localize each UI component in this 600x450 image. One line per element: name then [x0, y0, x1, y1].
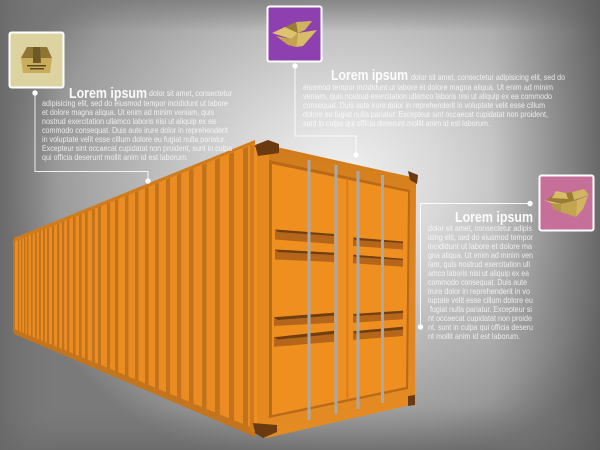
body text: qui officia deserunt mollit anim id est laborum.	[42, 152, 188, 162]
body text	[428, 223, 533, 341]
door frame	[250, 145, 416, 438]
body text: commodo consequat. Duis aute irure dolor in reprehenderit	[42, 125, 229, 135]
body text: et dolore magna aliqua. Ut enim ad minim veniam, quis	[42, 107, 214, 117]
body text: dolor sit amet, consectetur	[149, 88, 232, 98]
connector line: right callout	[418, 201, 533, 330]
body text: irure dolor in reprehenderit in vo	[428, 286, 530, 296]
icon: open box on pink	[540, 176, 594, 230]
container side wall with corrugation	[13, 140, 255, 440]
body text: iam, quis nostrud exercitation ull	[428, 259, 530, 269]
body text: eiusmod tempor incididunt ut labore et dolore magna aliqua. Ut enim ad minim	[303, 82, 553, 92]
body text: nt mollit anim id est laborum.	[428, 331, 520, 341]
door slots	[274, 230, 403, 347]
text block: top callout	[303, 68, 565, 128]
body text: adipisicing elit, sed do eiusmod tempor incididunt ut labore	[42, 98, 228, 108]
text block: left callout	[42, 86, 232, 162]
door recess outline	[269, 160, 410, 418]
body text: dolor sit amet, consectetur adipisicing elit, sed do	[411, 72, 565, 82]
heading: Lorem ipsum	[69, 86, 147, 102]
bottom rail	[14, 329, 255, 437]
connector line: top callout	[292, 63, 359, 158]
icon: closed cardboard box	[10, 32, 64, 88]
icon: open box on purple	[268, 6, 322, 62]
top rail	[14, 140, 255, 242]
corner post	[250, 147, 269, 433]
body text: Excepteur sint occaecat cupidatat non proident, sunt in culpa	[42, 143, 232, 153]
text block: right callout	[428, 210, 533, 341]
container door end	[250, 140, 418, 438]
body text: amco laboris nisi ut aliquip ex ea	[428, 268, 529, 278]
body text: veniam, quis nostrud exercitation ullamco laboris nisi ut aliquip ex ea commodo	[303, 91, 552, 101]
body text: commodo consequat. Duis aute	[428, 277, 527, 287]
body text: nostrud exercitation ullamco laboris nisi ut aliquip ex ea	[42, 116, 216, 126]
body text: nt, sunt in culpa qui officia deseru	[428, 322, 533, 332]
body text: dolore eu fugiat nulla pariatur. Excepteur sint occaecat cupidatat non proident,	[303, 109, 548, 119]
body text: nt occaecat cupidatat non proide	[428, 313, 532, 323]
body text: dolor sit amet, consectetur adipis	[428, 223, 532, 233]
door seam	[346, 178, 348, 398]
body text: consequat. Duis aute irure dolor in reprehenderit in voluptate velit esse cillum	[303, 100, 545, 110]
body text: luptate velit esse cillum dolore eu	[428, 295, 533, 305]
body text: in voluptate velit esse cillum dolore eu fugiat nulla pariatur.	[42, 134, 226, 144]
body text: icing elit, sed do eiusmod tempor	[428, 232, 533, 242]
connector line: left callout	[32, 90, 151, 184]
shipping container	[13, 140, 418, 440]
far end edge	[13, 240, 15, 332]
door panels	[272, 164, 408, 415]
body text: fugiat nulla pariatur. Excepteur si	[430, 304, 532, 314]
heading: Lorem ipsum	[455, 210, 533, 226]
body text	[303, 72, 565, 128]
heading: Lorem ipsum	[331, 68, 408, 84]
body text: gna aliqua. Ut enim ad minim ven	[428, 250, 533, 260]
locking rods	[308, 160, 384, 420]
corner castings	[253, 140, 418, 438]
body text: incididunt ut labore et dolore ma	[428, 241, 532, 251]
body text	[42, 88, 232, 162]
body text: sunt in culpa qui officia deserunt mollit anim id est laborum.	[303, 118, 490, 128]
